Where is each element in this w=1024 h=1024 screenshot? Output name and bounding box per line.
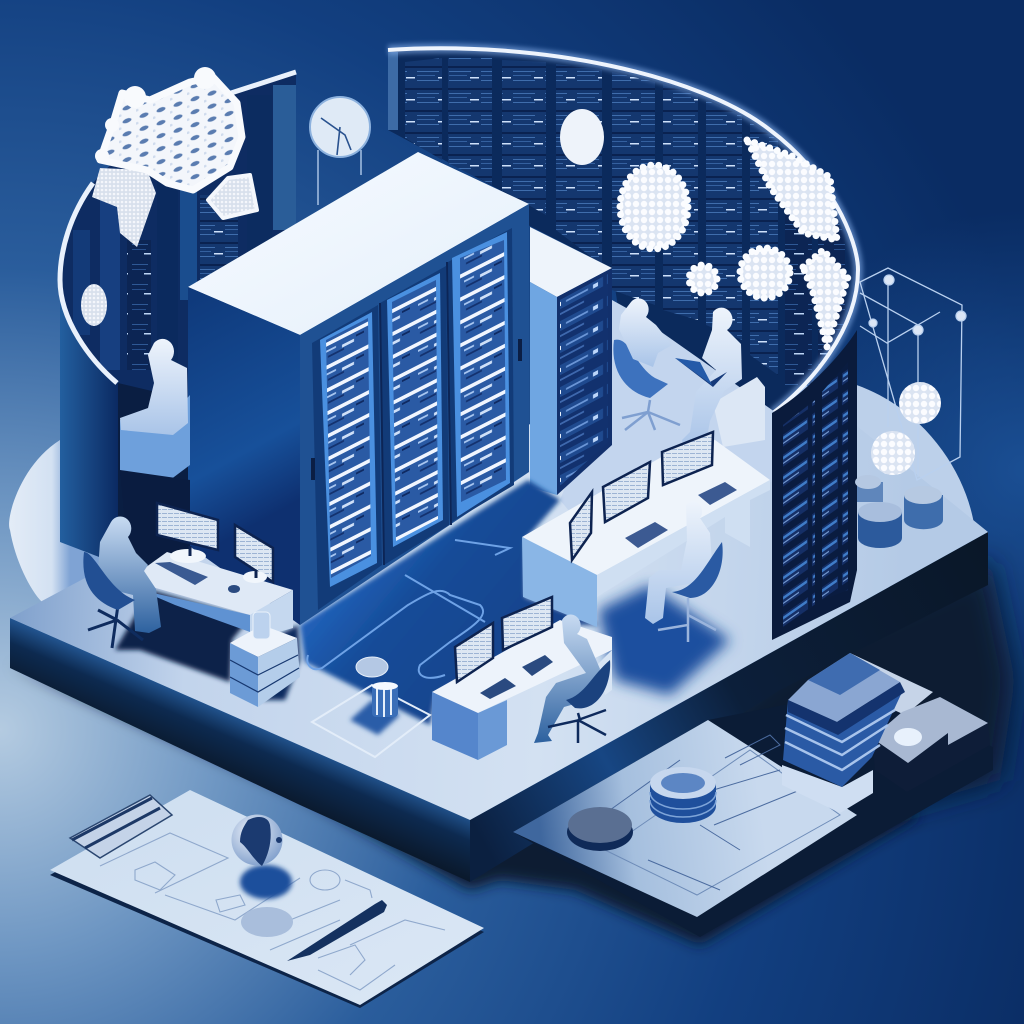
small landmass on left wall (81, 284, 107, 326)
person 2 (682, 308, 742, 448)
small chip on sheet (241, 907, 293, 937)
person (534, 614, 600, 743)
monitors (157, 503, 218, 550)
platform left face (10, 618, 470, 882)
cables (307, 540, 510, 678)
cabinet side (188, 287, 300, 625)
interior floor behind the cabinet (560, 300, 775, 560)
clipped tool (70, 795, 172, 858)
lumps (124, 86, 146, 108)
person (98, 516, 161, 633)
second stack top (872, 697, 988, 763)
floating spheres near cube (871, 382, 941, 475)
Eurasia (100, 77, 242, 190)
workstation left shadow (120, 470, 190, 570)
circular base disk (9, 380, 974, 620)
right curved wall panel (772, 330, 857, 640)
stack of books (782, 653, 990, 813)
cylindrical wall base (60, 280, 120, 565)
wall clock (310, 97, 370, 205)
Africa (92, 168, 156, 247)
blueprint sheet left (50, 790, 484, 1008)
keyboard (155, 562, 208, 585)
globe shadow (240, 865, 292, 899)
workstation right (522, 432, 770, 642)
door frames (312, 305, 382, 610)
seated pair (613, 298, 765, 448)
coin (567, 813, 633, 851)
white blob cluster: right wall (560, 109, 848, 347)
globe (232, 814, 282, 866)
person 1 (619, 298, 672, 367)
white blob cluster: world map (81, 67, 257, 326)
blueprint sheet right (513, 720, 857, 917)
door lit frames (320, 312, 377, 587)
glass (253, 612, 270, 639)
cabinet front (300, 204, 529, 625)
chair (613, 340, 668, 398)
rim (388, 48, 858, 413)
platform top surface (10, 380, 988, 820)
blue shadow under right desk (598, 585, 730, 695)
base under blueprint (513, 690, 993, 937)
curved back wall: left segment (60, 72, 296, 580)
desk (128, 552, 293, 615)
cabinet top (188, 152, 529, 335)
door gaps (380, 262, 451, 565)
person in left alcove (120, 339, 190, 495)
pen (287, 900, 387, 961)
curved back wall: main segment (388, 48, 858, 413)
handles (311, 458, 315, 480)
coin stack (650, 783, 716, 823)
cast shadow under platform (10, 560, 1015, 945)
platform right face (470, 532, 988, 882)
main server cabinet (188, 152, 529, 625)
chair (658, 598, 716, 642)
pages (783, 690, 903, 787)
tall secondary server cabinet (530, 227, 612, 495)
glass cube wireframe (860, 268, 966, 480)
rim glow (388, 48, 858, 413)
box (713, 377, 765, 447)
floor node with circuit outline (312, 685, 430, 757)
workstation left (83, 503, 293, 648)
platform (10, 380, 988, 882)
drawer block (230, 612, 300, 707)
chair (88, 605, 143, 648)
person (645, 501, 712, 624)
chair (548, 710, 606, 743)
rim (60, 72, 296, 383)
laptop (675, 358, 727, 387)
coin stacks right (855, 475, 943, 548)
alcove floor (118, 383, 190, 580)
workstation centre (432, 597, 612, 760)
door racks (326, 318, 371, 578)
book cover (788, 653, 900, 722)
chair base (622, 400, 680, 430)
second stack sides (872, 723, 990, 792)
back pad (850, 653, 933, 715)
white box (782, 765, 873, 813)
Australia (208, 175, 257, 218)
dark floor with cables (300, 480, 730, 757)
